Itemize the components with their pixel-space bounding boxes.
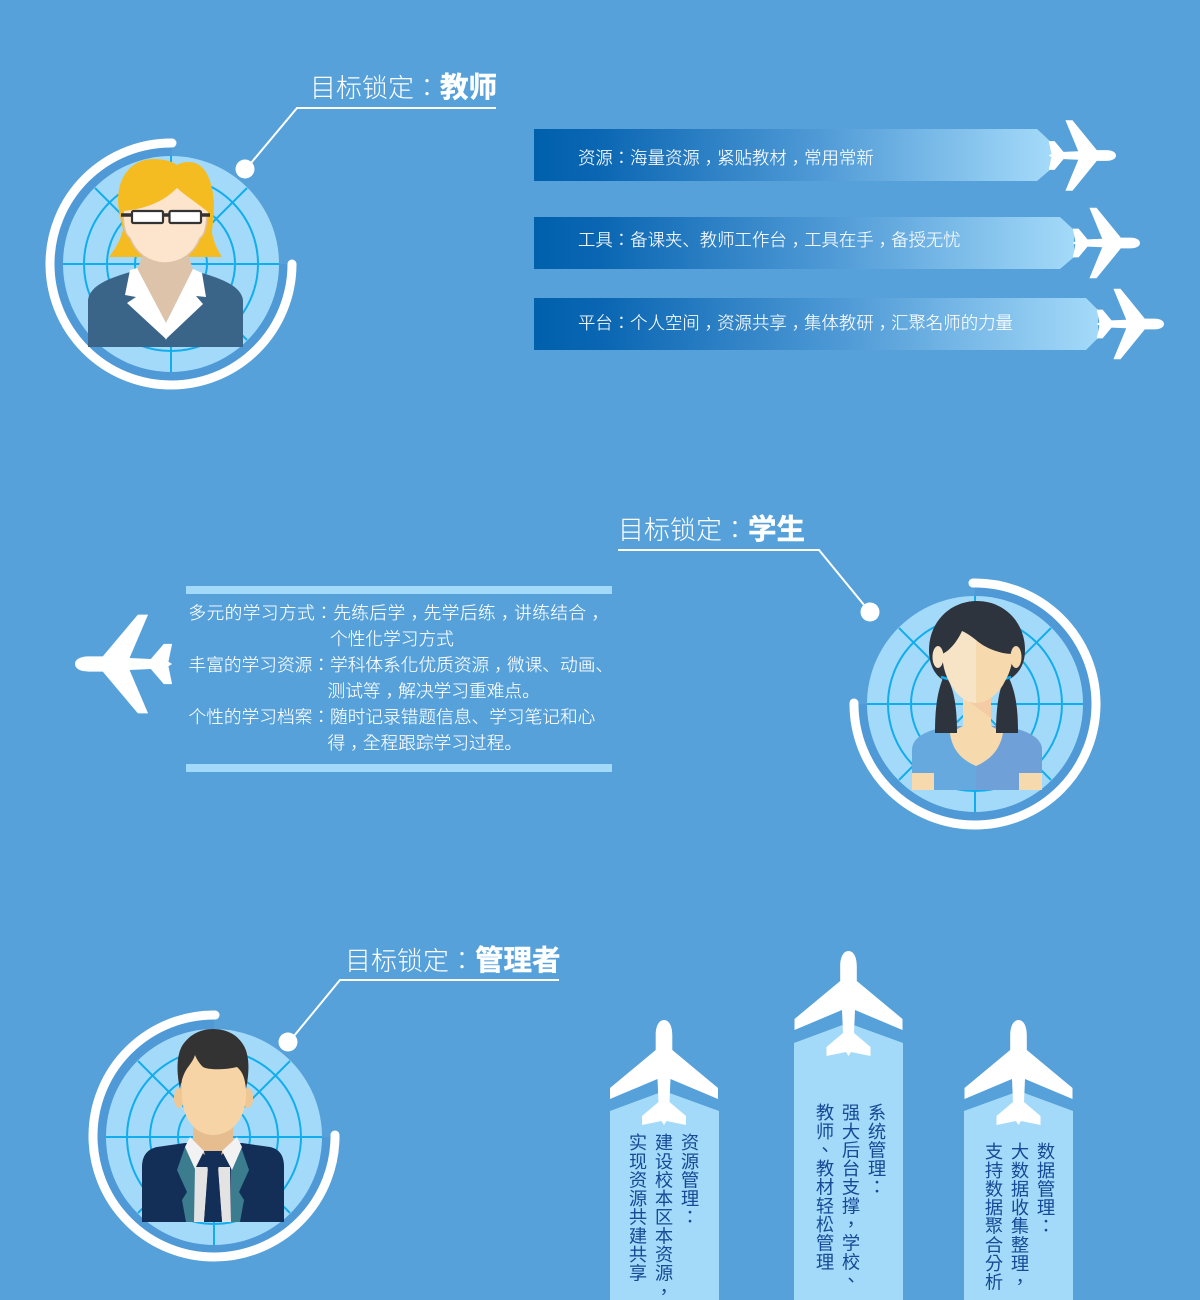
- panel: data management: 大数据收集整理，: [1009, 1142, 1030, 1291]
- callout line: teacher: [236, 108, 496, 178]
- text panel: student: 个性的学习档案：随时记录错题信息、学习笔记和心: [188, 707, 595, 727]
- teacher figure: [88, 159, 243, 347]
- heading: teacher: 目标锁定：教师: [310, 72, 497, 104]
- text panel: student: 个性化学习方式: [330, 629, 454, 649]
- text panel: student: 得 ，全程跟踪学习过程。: [328, 733, 522, 753]
- banner: platform: [534, 298, 1098, 350]
- icon: plane 2: [1073, 208, 1140, 278]
- panel: data management: [964, 1091, 1073, 1300]
- panel: system management: 强大后台支撑，学校、: [840, 1103, 861, 1290]
- icon: plane 3: [1097, 289, 1164, 359]
- callout line: manager: [278, 980, 559, 1052]
- heading: student: 目标锁定：学生: [618, 514, 805, 546]
- panel: resource management: 实现资源共建共享: [627, 1133, 648, 1282]
- text panel: student: [186, 586, 613, 772]
- radar disc: [63, 156, 279, 372]
- banner: tools: [534, 217, 1074, 269]
- panel: resource management: [610, 1091, 719, 1300]
- icon: plane 1: [1049, 120, 1116, 191]
- text panel: student: 丰富的学习资源：学科体系化优质资源 ，微课、动画、: [188, 655, 613, 675]
- white orbit arc: [854, 583, 1096, 825]
- panel: data management: 支持数据聚合分析: [983, 1142, 1004, 1291]
- white orbit arc: [50, 143, 292, 385]
- student figure: [912, 601, 1042, 790]
- radar disc: [106, 1029, 322, 1245]
- text panel: student: 多元的学习方式：先练后学 ，先学后练 ，讲练结合 ，: [188, 603, 610, 623]
- radar disc: [867, 596, 1083, 812]
- panel: resource management: 资源管理：: [679, 1133, 700, 1226]
- panel: resource management: 建设校本区本资源，: [653, 1133, 674, 1300]
- banner: resources: [534, 129, 1051, 181]
- panel: data management: 数据管理：: [1035, 1142, 1056, 1235]
- section: teacher avatar: [50, 143, 292, 385]
- icon: plane column 3: [964, 1020, 1072, 1125]
- banner: tools: 工具：备课夹、教师工作台 ，工具在手 ，备授无忧: [578, 230, 961, 250]
- icon: plane left: [75, 615, 172, 713]
- heading: manager: 目标锁定：管理者: [345, 945, 561, 977]
- banner: resources: 资源：海量资源 ，紧贴教材 ，常用常新: [578, 148, 874, 168]
- white orbit arc: [93, 1015, 335, 1257]
- panel: system management: 系统管理：: [866, 1103, 887, 1196]
- section: student avatar: [854, 583, 1096, 825]
- icon: plane column 1: [610, 1020, 718, 1125]
- icon: plane column 2: [794, 951, 902, 1056]
- section: manager avatar: [93, 1015, 335, 1257]
- text panel: student: 测试等 ，解决学习重难点。: [328, 681, 540, 701]
- manager figure: [142, 1029, 284, 1222]
- panel: system management: 教师、教材轻松管理: [814, 1103, 835, 1271]
- panel: system management: [794, 1023, 903, 1300]
- banner: platform: 平台：个人空间 ，资源共享 ，集体教研 ，汇聚名师的力量: [578, 313, 1013, 333]
- callout line: student: [618, 550, 880, 622]
